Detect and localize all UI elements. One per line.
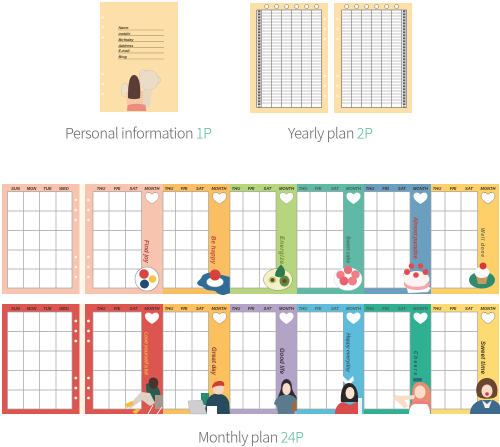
- panel: teal page: [297, 184, 364, 294]
- label: find joy: Find joy: [143, 240, 149, 264]
- panel: yellow page: FRI: [450, 186, 457, 191]
- panel: blue page: SAT: [398, 186, 406, 191]
- panel: blue page: THU: [366, 186, 375, 191]
- label: be happy: Be happy: [210, 236, 216, 265]
- panel: green page: [230, 184, 297, 294]
- panel: red left page: MON: [27, 306, 37, 311]
- row of hearts: [265, 4, 319, 8]
- panel: peach right page: MONTH: [144, 186, 161, 191]
- label: energize: Energize: [278, 236, 284, 265]
- icon: heart: [280, 313, 294, 324]
- panel: red left page: [2, 304, 80, 414]
- panel: peach right page: FRI: [114, 186, 121, 191]
- panel: blue page: [364, 184, 431, 294]
- panel: yellow page: MONTH: [480, 186, 497, 191]
- icon: heart: [280, 193, 294, 204]
- illustration: strawberry cake: [403, 263, 431, 293]
- panel: sky blue page: [297, 304, 364, 414]
- yearly grid: [257, 10, 322, 108]
- panel: green page: MONTH: [279, 186, 295, 191]
- panel: orange page: FRI: [181, 186, 188, 191]
- panel: yellow page two: FRI: [450, 306, 457, 311]
- panel: green page two: SAT: [398, 306, 406, 311]
- panel: sky blue page: FRI: [315, 306, 322, 311]
- panel: purple page: MONTH: [279, 306, 295, 311]
- panel: peach left page: WED: [59, 186, 69, 191]
- label: almost paradise: Almost paradise: [412, 216, 418, 260]
- illustration: girl hugging bear: [122, 70, 161, 111]
- label: good life: Good life: [278, 348, 284, 375]
- illustration: girl with bob hair: [470, 378, 500, 414]
- illustration: tomato bowl: [197, 270, 230, 295]
- panel: red right page: [85, 304, 163, 414]
- panel: peach right page: [85, 184, 163, 294]
- panel: teal page: THU: [299, 186, 308, 191]
- panel: red right page: THU: [97, 306, 106, 311]
- icon: heart: [414, 313, 428, 324]
- illustration: sitting girl: [125, 377, 163, 414]
- panel: sky blue page: SAT: [331, 306, 339, 311]
- panel: sky blue page: MONTH: [346, 306, 362, 311]
- panel: green page: FRI: [248, 186, 255, 191]
- panel: peach left page: [2, 184, 80, 294]
- caption: monthly plan: Monthly plan 24P: [198, 426, 304, 447]
- illustration: girl with bow: [335, 376, 362, 414]
- caption: personal information: Personal information 1P: [65, 122, 212, 144]
- label: well done: Well done: [479, 228, 485, 257]
- panel: teal page: SAT: [331, 186, 339, 191]
- form fields: Address: [118, 44, 133, 48]
- form fields: Birthday: [118, 38, 134, 42]
- panel: blue page: FRI: [382, 186, 390, 191]
- panel: orange page: MONTH: [211, 186, 228, 191]
- icon: heart: [481, 193, 495, 204]
- panel: green page two: THU: [366, 306, 375, 311]
- icon: heart: [346, 193, 360, 204]
- panel: orange page two: THU: [165, 306, 174, 311]
- panel: red left page: SUN: [11, 306, 21, 311]
- panel: blue page: MONTH: [413, 186, 429, 191]
- panel: green page: THU: [232, 186, 241, 191]
- form fields: Name: [118, 26, 129, 30]
- icon: heart: [145, 313, 159, 324]
- illustration: fruit plate: [135, 267, 159, 291]
- panel: orange page: THU: [165, 186, 174, 191]
- panel: purple page: FRI: [248, 306, 255, 311]
- label: sweet cake: Sweet cake: [344, 236, 350, 263]
- panel: red right page: FRI: [114, 306, 121, 311]
- panel: yellow page: THU: [433, 186, 442, 191]
- icon: heart: [481, 313, 495, 324]
- panel: yearly plan left page: [250, 3, 328, 113]
- panel: yellow page: [431, 184, 499, 294]
- panel: orange page: [163, 184, 230, 295]
- panel: purple page: SAT: [264, 306, 272, 311]
- icon: heart: [212, 313, 226, 324]
- label: love yourself: Love yourself a lot: [142, 332, 148, 376]
- panel: peach left page: TUE: [43, 186, 52, 191]
- illustration: avocado plate: [264, 264, 292, 290]
- panel: purple page: THU: [232, 306, 241, 311]
- panel: yellow page two: SAT: [465, 306, 473, 311]
- label: sweet time: Sweet time: [479, 341, 485, 375]
- panel: green page two: [364, 304, 432, 414]
- illustration: cupcake: [469, 262, 495, 288]
- panel: personal information page: [100, 2, 178, 112]
- panel: orange page two: MONTH: [211, 306, 228, 311]
- panel: green page two: FRI: [382, 306, 390, 311]
- panel: green page: SAT: [264, 186, 272, 191]
- panel: red right page: MONTH: [144, 306, 161, 311]
- panel: red left page: TUE: [43, 306, 52, 311]
- yearly grid: [342, 10, 407, 108]
- illustration: girl with bag: [274, 379, 299, 414]
- illustration: girl with laptop: [188, 381, 230, 414]
- panel: yellow page: SAT: [465, 186, 473, 191]
- panel: orange page two: FRI: [181, 306, 188, 311]
- panel: purple page: [230, 304, 299, 414]
- illustration: girl with sunglasses: [393, 378, 432, 414]
- label: happy everyday: Happy everyday: [344, 333, 350, 373]
- panel: yearly plan right page: [334, 3, 412, 113]
- panel: yellow page two: [431, 304, 500, 414]
- panel: yellow page two: MONTH: [480, 306, 497, 311]
- panel: peach left page: MON: [27, 186, 37, 191]
- panel: sky blue page: THU: [299, 306, 308, 311]
- icon: heart: [414, 193, 428, 204]
- form fields: Blog: [118, 55, 127, 59]
- panel: red left page: WED: [59, 306, 69, 311]
- icon: heart: [212, 193, 226, 204]
- panel: teal page: FRI: [315, 186, 322, 191]
- panel: peach right page: THU: [97, 186, 106, 191]
- illustration: macaron plate: [334, 266, 362, 290]
- form fields: E-mail: [118, 49, 131, 53]
- row of hearts: [345, 4, 399, 8]
- form fields: mobile: [118, 32, 130, 36]
- panel: orange page: SAT: [196, 186, 204, 191]
- label: cheers: Cheers: [412, 351, 418, 375]
- panel: red right page: SAT: [130, 306, 138, 311]
- panel: teal page: MONTH: [346, 186, 362, 191]
- icon: heart: [346, 313, 360, 324]
- panel: peach left page: SUN: [11, 186, 21, 191]
- label: great day: Great day: [210, 347, 216, 376]
- panel: orange page two: SAT: [196, 306, 204, 311]
- caption: yearly plan: Yearly plan 2P: [288, 122, 373, 144]
- panel: green page two: MONTH: [413, 306, 429, 311]
- panel: yellow page two: THU: [433, 306, 442, 311]
- panel: orange page two: [163, 304, 230, 414]
- form fields: [118, 26, 164, 59]
- icon: heart: [145, 193, 159, 204]
- panel: peach right page: SAT: [130, 186, 138, 191]
